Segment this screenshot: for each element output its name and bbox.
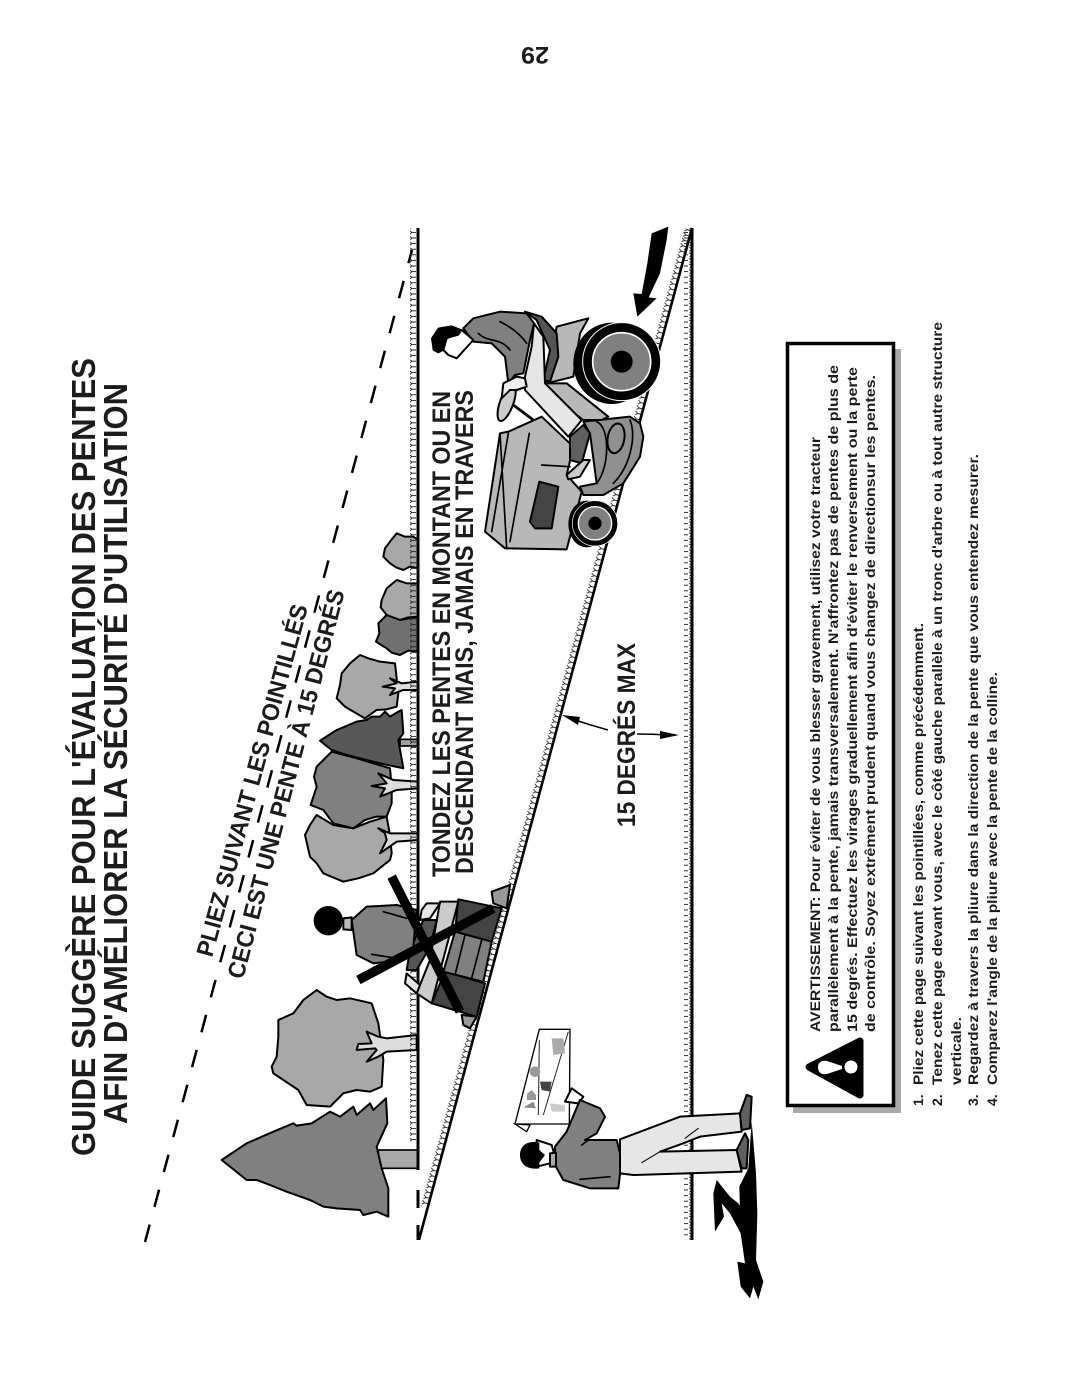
warning text: 15 degrés. Effectuez les virages graduellement afin d'éviter le renversement ou la perte [844, 367, 860, 1032]
folded page [515, 1029, 570, 1132]
X mark [358, 877, 493, 1012]
warning text: parallèlement à la pente, jamais transversalement. N'affrontez pas de pentes de plus de [825, 365, 841, 1032]
person on tractor viewed from behind crossed out [314, 877, 510, 1028]
middle instruction text: TONDEZ LES PENTES EN MONTANT OU EN [428, 391, 456, 877]
warning text [807, 365, 878, 1032]
middle instruction text [428, 390, 479, 877]
ground line lower [684, 228, 692, 1240]
title [65, 358, 134, 1156]
warning text: AVERTISSEMENT: Pour éviter de vous blesser gravement, utilisez votre tracteur [807, 436, 823, 1032]
numbered instructions: 4. [984, 1094, 1000, 1106]
warning box [788, 344, 901, 1113]
numbered instructions: 1. [910, 1094, 926, 1106]
shadow [713, 1122, 763, 1299]
trees lower group [222, 990, 418, 1217]
numbered instructions: 3. [965, 1094, 981, 1106]
warning text: de contrôle. Soyez extrêment prudent quand vous changez de directionsur les pentes. [862, 375, 878, 1032]
title: AFIN D'AMÉLIORER LA SÉCURITÉ D'UTILISATION [97, 383, 134, 1124]
page number: 29 [521, 41, 549, 68]
hill slope line with grass [411, 226, 692, 1240]
title: GUIDE SUGGÈRE POUR L'ÉVALUATION DES PENTES [65, 358, 102, 1156]
numbered instructions: Tenez cette page devant vous, avec le côté gauche parallèle à un tronc d'arbre ou à tout autre structure [929, 322, 945, 1085]
numbered instructions: Regardez à travers la pliure dans la direction de la pente que vous entendez mesurer. [965, 454, 981, 1085]
numbered instructions: Comparez l'angle de la pliure avec la pente de la colline. [984, 672, 1000, 1085]
numbered instructions [910, 322, 1000, 1106]
trees upper group [305, 533, 418, 882]
standing man holding page [515, 1029, 763, 1299]
angle arrows [562, 715, 679, 739]
middle instruction text: DESCENDANT MAIS, JAMAIS EN TRAVERS [451, 390, 479, 874]
numbered instructions: 2. [929, 1094, 945, 1106]
degrees label: 15 DEGRÉS MAX [612, 643, 641, 827]
ride-on tractor with driver [432, 312, 661, 549]
numbered instructions: verticale. [948, 1017, 964, 1085]
fold instruction text: PLIEZ SUIVANT LES POINTILLÉS [191, 601, 314, 960]
fold dashed line [145, 250, 412, 1242]
icon: warning triangle [809, 1041, 860, 1095]
direction arrow [633, 227, 668, 317]
fold instruction text: CECI EST UNE PENTE À 15 DEGRÉS [222, 587, 351, 982]
numbered instructions: Pliez cette page suivant les pointillées, comme précédemment. [910, 623, 926, 1085]
ground line upper [410, 228, 418, 1240]
